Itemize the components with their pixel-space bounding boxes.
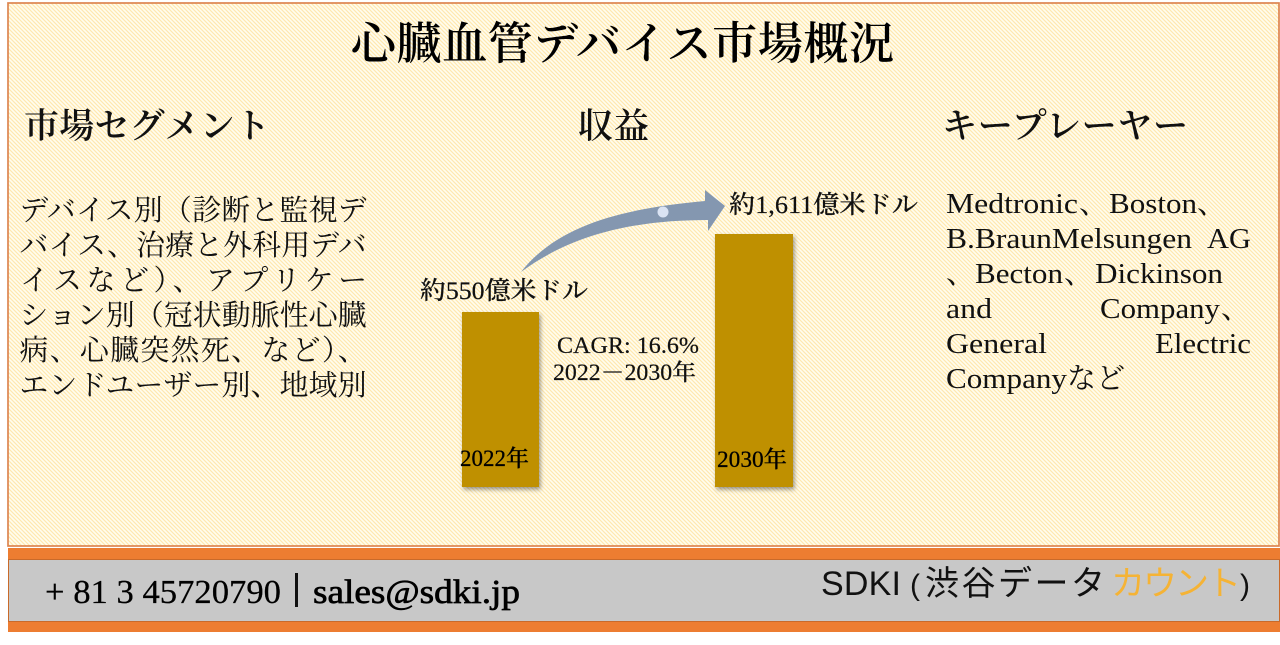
heading: market segments: 市場セグメント — [24, 107, 270, 146]
text block: key players: 、 — [1064, 258, 1093, 290]
text block: key players: Company — [1100, 293, 1221, 325]
text block: key players: 、 — [1221, 293, 1250, 325]
text block: key players: Becton — [975, 258, 1064, 290]
text block: key players: B.BraunMelsungen — [946, 223, 1193, 255]
text block: key players: 、 — [1197, 188, 1226, 220]
brand name — [821, 565, 1250, 603]
text block: key players: Medtronic — [946, 188, 1078, 220]
text block: market segments: イスなど）、アプリケー — [20, 265, 367, 297]
value label: 2022: 約550億米ドル — [420, 277, 588, 305]
arrow: growth — [521, 190, 725, 272]
bar: 2022 — [462, 312, 539, 487]
heading: key players: キープレーヤー — [942, 107, 1188, 146]
brand name: カウント — [1111, 565, 1241, 603]
heading: revenue: 収益 — [578, 107, 649, 146]
bar label: 2030: 2030年 — [717, 447, 787, 472]
text block: key players: Boston — [1109, 188, 1198, 220]
CAGR label — [553, 333, 699, 385]
text block: market segments: エンドユーザー別、地域別 — [20, 370, 366, 402]
bar: 2030 — [715, 234, 793, 487]
brand name: ) — [1240, 569, 1250, 602]
text block: key players: and — [946, 293, 993, 325]
brand name: ( — [910, 569, 920, 602]
text block: market segments: バイス、治療と外科用デバ — [20, 230, 366, 262]
text block: market segments: ション別（冠状動脈性心臓 — [20, 300, 367, 332]
contact details: sales@sdki.jp — [313, 574, 520, 611]
value label: 2030: 約1,611億米ドル — [729, 191, 918, 219]
bar label: 2022: 2022年 — [460, 446, 529, 471]
contact strip — [8, 560, 1280, 622]
text block: key players: General — [946, 328, 1047, 360]
text block: key players: Dickinson — [1095, 258, 1224, 290]
text block: key players: AG — [1207, 223, 1251, 255]
text block: key players: Company — [946, 363, 1068, 395]
footer band — [8, 548, 1280, 632]
text block: key players — [946, 188, 1251, 395]
text block: key players: 、 — [946, 258, 975, 290]
text block: market segments: 病、心臓突然死、など）、 — [20, 335, 366, 367]
contact details — [45, 573, 520, 611]
CAGR label: 2022－2030年 — [553, 360, 696, 385]
contact details: + 81 3 45720790 — [45, 574, 281, 611]
CAGR label: CAGR: 16.6% — [557, 333, 699, 358]
text block: key players: Electric — [1155, 328, 1251, 360]
title: 心臓血管デバイス市場概況 — [351, 19, 894, 69]
text block: key players: など — [1067, 363, 1125, 395]
brand name: SDKI — [821, 565, 901, 603]
text block: key players: 、 — [1079, 188, 1108, 220]
brand name: 渋谷データ — [925, 565, 1105, 603]
text block: market segments: デバイス別（診断と監視デ — [20, 195, 367, 227]
text block: market segments — [20, 195, 367, 402]
